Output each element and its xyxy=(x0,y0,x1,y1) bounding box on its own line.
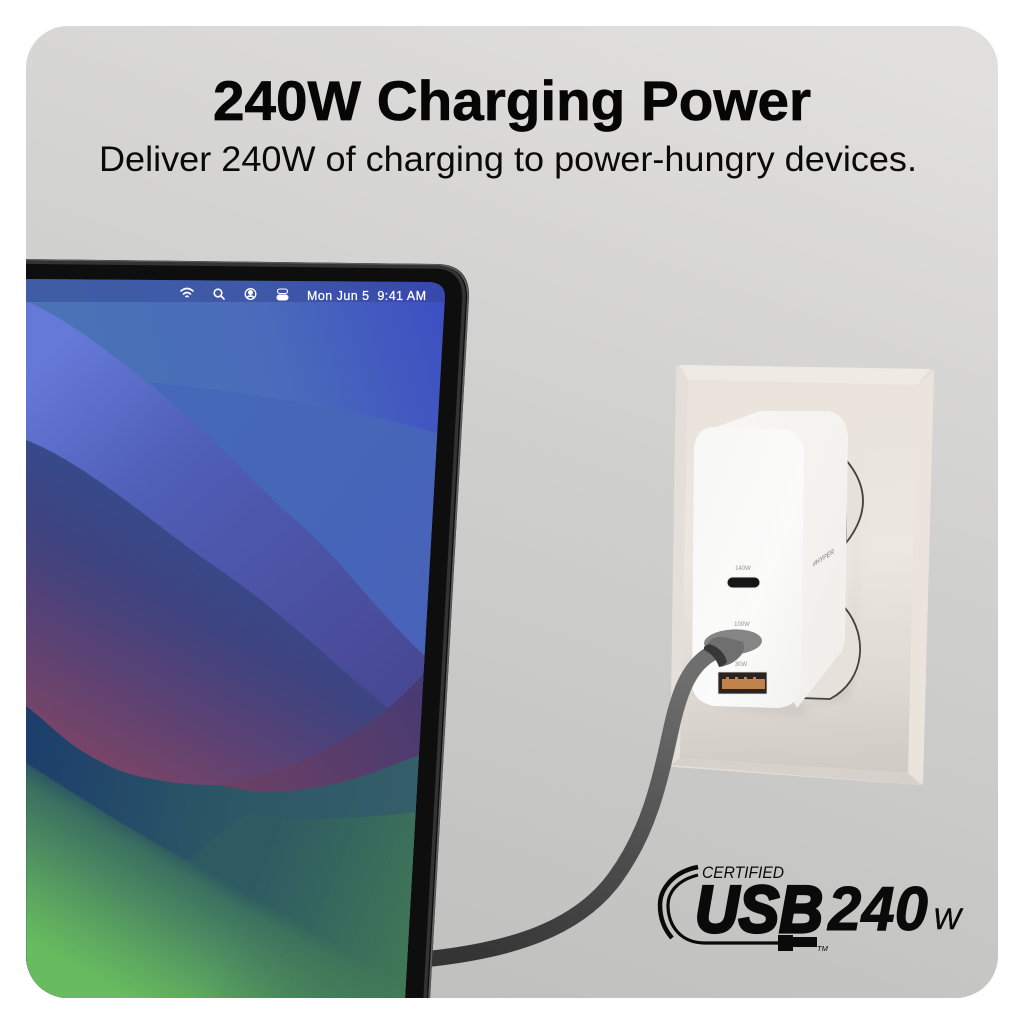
user icon xyxy=(245,289,256,299)
USB cable arcs xyxy=(660,867,780,943)
label: 100W: 100W xyxy=(734,622,750,628)
teal wave xyxy=(26,706,450,1000)
green hills xyxy=(26,763,450,1000)
charger shadow xyxy=(700,430,860,716)
charger front face xyxy=(692,427,804,708)
USB plug glyph xyxy=(778,935,817,951)
wall plate xyxy=(670,365,934,785)
W: W xyxy=(933,903,964,936)
tablet xyxy=(20,259,469,1005)
tablet bezel edge xyxy=(20,260,468,1000)
wifi icon xyxy=(181,288,193,296)
USB-A port xyxy=(718,672,767,694)
charger xyxy=(692,411,848,708)
periwinkle wave xyxy=(26,301,450,740)
certified: CERTIFIED xyxy=(702,864,784,882)
subtitle: Deliver 240W of charging to power-hungry devices. xyxy=(99,140,917,179)
charging cable xyxy=(428,628,763,959)
outlet recess arcs xyxy=(800,460,863,699)
title: 240W Charging Power xyxy=(213,69,811,132)
purple wedge xyxy=(222,674,424,792)
tablet bezel xyxy=(20,259,469,1000)
label: 30W: 30W xyxy=(735,662,748,668)
USB: USB xyxy=(695,872,823,946)
tablet screen wallpaper xyxy=(20,275,450,1005)
brand mark: #HYPER xyxy=(813,547,834,569)
240: 240 xyxy=(827,875,928,944)
Certified USB 240W logo xyxy=(660,864,964,953)
charger side body xyxy=(714,411,848,708)
blue to red wave xyxy=(26,440,440,800)
cable plug xyxy=(703,628,763,667)
menu bar clock: Mon Jun 5 9:41 AM xyxy=(307,289,426,303)
USB-C port xyxy=(727,577,760,588)
control switches icon xyxy=(277,289,288,300)
label: 140W: 140W xyxy=(735,566,751,572)
search icon xyxy=(214,289,224,299)
menu bar icons xyxy=(181,288,288,300)
menu bar xyxy=(26,279,445,302)
trademark: TM xyxy=(817,944,829,953)
